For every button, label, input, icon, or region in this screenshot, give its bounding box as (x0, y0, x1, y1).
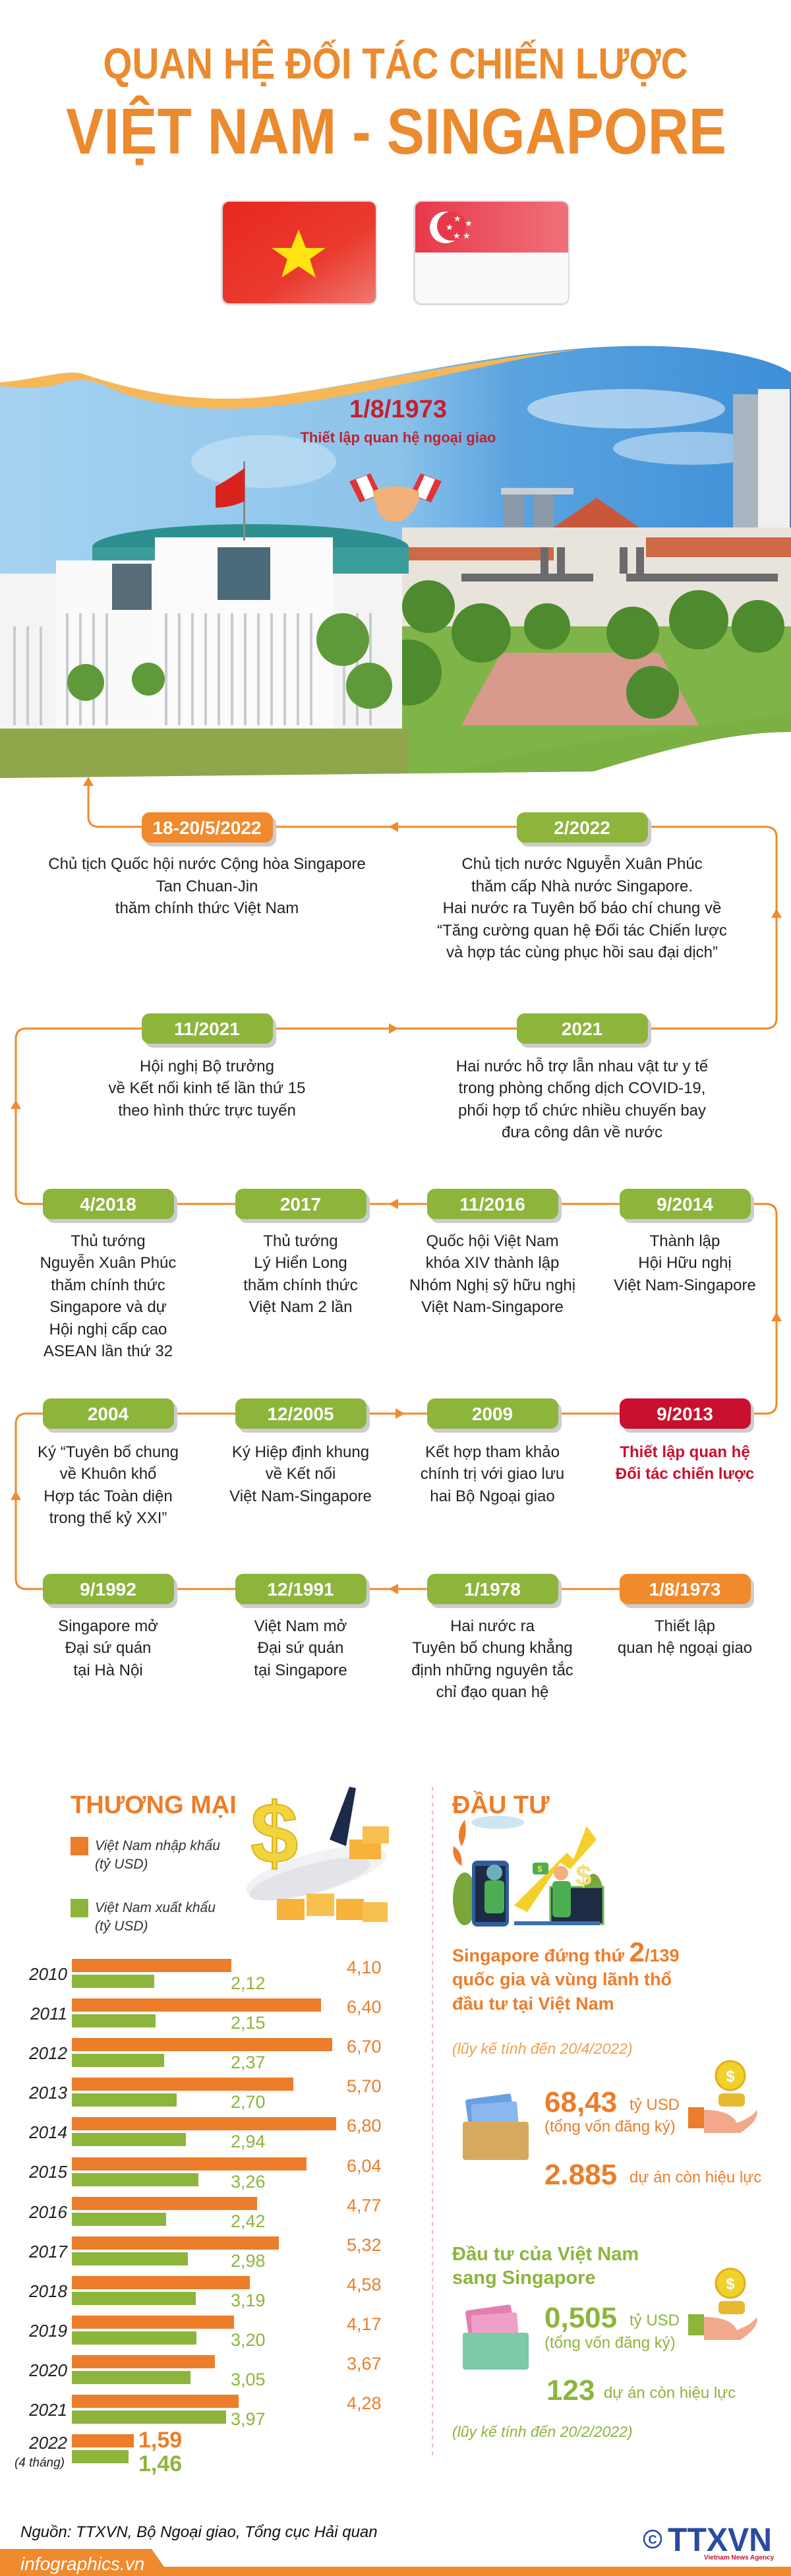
bar chart: trade: 2015 (28, 2162, 68, 2182)
stat: 123 projects: dự án còn hiệu lực (604, 2384, 736, 2402)
event: 11/2021: 11/2021 (174, 1019, 240, 1039)
event: 2009: Kết hợp tham khảo (425, 1443, 560, 1461)
title (66, 39, 726, 167)
event: 2021: đưa công dân về nước (502, 1123, 662, 1141)
text: Vietnam investment to Singapore: sang Singapore (452, 2267, 596, 2289)
icon: Singapore flag: ★ (465, 218, 473, 228)
event: 2004: về Khuôn khổ (60, 1465, 156, 1483)
bar chart: trade: 2013 (28, 2083, 68, 2103)
bar chart: trade: (4 tháng) (15, 2456, 65, 2470)
bar chart: trade: 2021 (28, 2400, 67, 2420)
event: 12/2005: Việt Nam-Singapore (229, 1487, 372, 1505)
banner date caption: Thiết lập quan hệ ngoại giao (300, 429, 496, 446)
event: 12/2005: về Kết nối (266, 1465, 336, 1483)
timeline connector (16, 779, 776, 1589)
event: 4/2018: 4/2018 (80, 1194, 136, 1214)
icon: coin in hand green (688, 2269, 757, 2340)
event: 2004: Hợp tác Toàn diện (44, 1487, 173, 1505)
event: 4/2018: ASEAN lần thứ 32 (44, 1342, 173, 1360)
event: 1/1978: Tuyên bố chung khẳng (412, 1638, 573, 1657)
text: Singapore ranking (452, 1936, 680, 2014)
bar chart: trade: 5,32 (347, 2235, 382, 2255)
event: 11/2016: Quốc hội Việt Nam (426, 1232, 559, 1250)
event: 1/1978: Hai nước ra (450, 1617, 535, 1635)
event: 2017 (235, 1189, 370, 1316)
timeline row 2 (109, 1013, 709, 1141)
bar chart: trade: 2,15 (231, 2013, 266, 2033)
arrows on timeline (11, 777, 782, 1594)
bar chart: trade: 2010 (28, 1964, 68, 1984)
event: 1/8/1973 (618, 1574, 754, 1657)
event: 2/2022: Hai nước ra Tuyên bố báo chí chung về (443, 899, 721, 917)
bar chart: trade: 2019 (28, 2321, 67, 2341)
event: 11/2016: Việt Nam-Singapore (421, 1298, 564, 1316)
note: cumulative 20/2/2022: (lũy kế tính đến 20/2/2022) (452, 2423, 633, 2440)
bar chart: trade: 2020 (28, 2360, 68, 2380)
event: 4/2018: Nguyễn Xuân Phúc (40, 1254, 176, 1272)
bar chart: trade: 6,40 (347, 1997, 382, 2017)
event: 1/8/1973: quan hệ ngoại giao (618, 1639, 752, 1657)
event: 11/2016: khóa XIV thành lập (426, 1254, 559, 1272)
event: 11/2016: Nhóm Nghị sỹ hữu nghị (409, 1276, 575, 1294)
stat: 0,505 tỷ USD: (tổng vốn đăng ký) (544, 2334, 676, 2352)
bar chart: trade: 6,70 (347, 2037, 382, 2056)
event: 18-20/5/2022 (48, 812, 366, 917)
event: 4/2018: Hội nghị cấp cao (49, 1321, 167, 1338)
event: 2/2022: thăm cấp Nhà nước Singapore. (471, 878, 693, 895)
event: 2017: Lý Hiển Long (254, 1254, 347, 1272)
text: Singapore ranking: Singapore đứng thứ 2/139 (452, 1936, 680, 1967)
event: 1/1978: 1/1978 (464, 1579, 521, 1600)
event: 11/2021 (109, 1013, 305, 1120)
legend: (tỷ USD) (95, 1919, 148, 1934)
event: 18-20/5/2022: thăm chính thức Việt Nam (115, 899, 299, 917)
banner date caption (300, 396, 496, 446)
bar chart: trade: 4,77 (347, 2196, 382, 2215)
event: 9/2014: 9/2014 (657, 1194, 713, 1214)
bar chart: trade: 3,20 (231, 2330, 266, 2350)
bar chart: trade: 2014 (28, 2122, 67, 2142)
title: QUAN HỆ ĐỐI TÁC CHIẾN LƯỢC (103, 39, 688, 88)
event: 2004: Ký “Tuyên bố chung (38, 1443, 179, 1461)
event: 2009: 2009 (472, 1404, 513, 1424)
stat: 68,43 tỷ USD: tỷ USD (630, 2096, 680, 2114)
bar chart: trade: 2012 (28, 2043, 68, 2063)
stat: 2.885 projects: dự án còn hiệu lực (630, 2169, 761, 2186)
event: 2004: 2004 (88, 1404, 129, 1424)
event: 12/1991 (235, 1574, 370, 1679)
banner date caption: 1/8/1973 (349, 396, 447, 423)
event: 2/2022: 2/2022 (554, 818, 610, 838)
bar chart: trade: 1,46 (138, 2451, 182, 2476)
event: 9/1992 (43, 1574, 177, 1679)
event: 2021: 2021 (562, 1019, 602, 1039)
event: 2021: phối hợp tổ chức nhiều chuyến bay (458, 1102, 706, 1120)
footer bar (0, 2549, 791, 2576)
stat: 2.885 projects: 2.885 (544, 2159, 617, 2191)
bar chart: trade: 5,70 (347, 2076, 382, 2096)
event: 2009 (421, 1398, 564, 1505)
stat: 0,505 tỷ USD: 0,505 (544, 2302, 617, 2334)
event: 9/2013: 9/2013 (657, 1404, 713, 1424)
bar chart: trade: 4,10 (347, 1958, 382, 1977)
event: 2017: Việt Nam 2 lần (249, 1298, 352, 1316)
bar chart: trade: 6,04 (347, 2156, 382, 2176)
event: 9/2014: Hội Hữu nghị (638, 1254, 732, 1272)
event: 11/2021: về Kết nối kinh tế lần thứ 15 (109, 1079, 305, 1097)
event: 2017: Thủ tướng (263, 1232, 338, 1250)
event: 12/1991: tại Singapore (254, 1662, 347, 1679)
event: 12/2005 (229, 1398, 372, 1505)
photo banner (0, 343, 791, 791)
event: 9/2014: Thành lập (650, 1232, 720, 1250)
icon: yellow folder (463, 2093, 529, 2160)
bar chart: trade: 2011 (30, 2004, 67, 2023)
event: 1/8/1973: Thiết lập (655, 1617, 715, 1635)
footer bar: infographics.vn (20, 2554, 144, 2574)
event: 2/2022: Chủ tịch nước Nguyễn Xuân Phúc (461, 855, 703, 873)
event: 2/2022 (437, 812, 727, 961)
event: 2009: hai Bộ Ngoại giao (430, 1487, 555, 1505)
event: 11/2021: Hội nghị Bộ trưởng (140, 1058, 274, 1075)
stat: 68,43 tỷ USD: (tổng vốn đăng ký) (544, 2118, 676, 2136)
text: Vietnam investment to Singapore: Đầu tư của Việt Nam (452, 2244, 639, 2265)
bar chart: trade: 1,59 (138, 2428, 182, 2453)
event: 9/2014 (614, 1189, 756, 1294)
event: 2/2022: và hợp tác cùng phục hồi sau đại dịch” (446, 944, 718, 961)
source: Nguồn: TTXVN, Bộ Ngoại giao, Tổng cục Hải quan (20, 2523, 378, 2541)
icon: Singapore flag (413, 200, 570, 305)
event: 9/2013 (616, 1398, 754, 1483)
note: cumulative 20/4/2022: (lũy kế tính đến 20/4/2022) (452, 2040, 633, 2057)
event: 2017: 2017 (280, 1194, 321, 1214)
event: 2021: trong phòng chống dịch COVID-19, (459, 1079, 705, 1097)
bar chart: trade: 3,97 (231, 2409, 266, 2429)
event: 2021 (456, 1013, 709, 1141)
stat: 123 projects (546, 2374, 736, 2407)
icon: dollar and plane: $ (250, 1785, 298, 1881)
icon: Singapore flag: ★ (446, 222, 454, 232)
event: 9/1992: Singapore mở (58, 1617, 158, 1635)
event: 2/2022: “Tăng cường quan hệ Đối tác Chiến lược (437, 922, 727, 940)
timeline row 1 (48, 812, 727, 961)
legend: Việt Nam nhập khẩu (95, 1838, 220, 1853)
text: Vietnam investment to Singapore (452, 2244, 639, 2289)
event: 4/2018 (40, 1189, 177, 1360)
icon: Singapore flag: ★ (454, 214, 461, 224)
event: 18-20/5/2022: 18-20/5/2022 (152, 818, 262, 838)
icon: coin in hand (688, 2061, 757, 2133)
stat: 68,43 tỷ USD: 68,43 (544, 2086, 617, 2118)
stat: 0,505 tỷ USD (544, 2302, 680, 2352)
event: 11/2021: theo hình thức trực tuyến (118, 1102, 296, 1120)
icon: Vietnam flag (221, 200, 377, 305)
event: 12/1991: 12/1991 (267, 1579, 334, 1600)
logo: TTXVN: Vietnam News Agency (704, 2554, 775, 2561)
bar chart: trade: 2,42 (231, 2211, 266, 2231)
bar chart: trade: 4,17 (347, 2314, 382, 2334)
bar chart: trade: 2022 (28, 2433, 68, 2453)
bar chart: trade: 2,94 (231, 2132, 266, 2151)
stat: 68,43 tỷ USD (544, 2086, 680, 2136)
event: 18-20/5/2022: Chủ tịch Quốc hội nước Cộng hòa Singapore (48, 855, 366, 873)
event: 12/1991: Việt Nam mở (254, 1617, 347, 1635)
bar chart: trade: 2,98 (231, 2251, 266, 2271)
event: 4/2018: thăm chính thức (51, 1276, 165, 1294)
bar chart: trade: 4,28 (347, 2393, 382, 2413)
icon: investment illustration: $ (537, 1864, 542, 1874)
heading: THƯƠNG MẠI: THƯƠNG MẠI (71, 1791, 237, 1819)
icon: Singapore flag: ★ (453, 231, 461, 241)
event: 1/1978: chỉ đạo quan hệ (436, 1683, 548, 1701)
stat: 123 projects: 123 (546, 2374, 595, 2407)
icon: handshake (349, 473, 442, 522)
timeline row 3 (40, 1189, 756, 1360)
event: 1/1978: định những nguyên tắc (411, 1662, 573, 1679)
event: 2004: trong thế kỷ XXI” (49, 1509, 167, 1527)
event: 2017: thăm chính thức (243, 1276, 358, 1294)
icon: coin in hand green: $ (726, 2275, 735, 2293)
event: 9/1992: 9/1992 (80, 1579, 136, 1600)
legend: (tỷ USD) (95, 1857, 148, 1872)
event: 12/1991: Đại sứ quán (258, 1639, 343, 1657)
timeline row 5 (43, 1574, 754, 1701)
bar chart: trade: 2017 (28, 2242, 69, 2261)
bar chart: trade: 2,37 (231, 2052, 266, 2072)
event: 2021: Hai nước hỗ trợ lẫn nhau vật tư y tế (456, 1058, 709, 1075)
stat: 0,505 tỷ USD: tỷ USD (630, 2312, 680, 2329)
event: 12/2005: Ký Hiệp định khung (232, 1443, 369, 1461)
bar chart: trade: 2,12 (231, 1973, 266, 1993)
bar chart: trade: 3,05 (231, 2370, 266, 2389)
event: 4/2018: Thủ tướng (71, 1232, 146, 1250)
event: 4/2018: Singapore và dự (49, 1298, 167, 1316)
event: 9/2013: Đối tác chiến lược (616, 1465, 754, 1483)
bar chart: trade: 2,70 (231, 2092, 266, 2112)
bar chart: trade: 3,19 (231, 2291, 266, 2310)
event: 12/2005: 12/2005 (267, 1404, 334, 1424)
icon: investment illustration (453, 1816, 604, 1927)
icon: Singapore flag: ★ (463, 231, 471, 241)
logo: TTXVN: C (649, 2533, 657, 2546)
event: 2009: chính trị với giao lưu (421, 1465, 564, 1483)
event: 9/1992: tại Hà Nội (73, 1662, 143, 1679)
bar chart: trade: 2018 (28, 2281, 68, 2301)
legend (71, 1837, 220, 1934)
bar chart: trade: 3,67 (347, 2354, 382, 2374)
event: 9/1992: Đại sứ quán (65, 1639, 151, 1657)
event: 1/8/1973: 1/8/1973 (649, 1579, 721, 1600)
event: 1/1978 (411, 1574, 573, 1701)
icon: dollar and plane (241, 1785, 392, 1922)
timeline row 4 (38, 1398, 754, 1527)
bar chart: trade: 4,58 (347, 2275, 382, 2294)
bar chart: trade (15, 1958, 382, 2476)
event: 9/2014: Việt Nam-Singapore (614, 1276, 756, 1294)
legend: Việt Nam xuất khẩu (95, 1900, 216, 1915)
text: Singapore ranking: quốc gia và vùng lãnh thổ (452, 1969, 672, 1989)
event: 11/2016 (409, 1189, 575, 1316)
bar chart: trade: 6,80 (347, 2116, 382, 2136)
stat: 2.885 projects (544, 2159, 761, 2191)
bar chart: trade: 2016 (28, 2202, 68, 2222)
icon: investment illustration: $ (575, 1860, 591, 1892)
event: 11/2016: 11/2016 (459, 1194, 525, 1214)
logo: TTXVN: TTXVN (668, 2521, 772, 2558)
event: 18-20/5/2022: Tan Chuan-Jin (156, 878, 258, 895)
event: 9/2013: Thiết lập quan hệ (620, 1443, 750, 1461)
text: Singapore ranking: đầu tư tại Việt Nam (452, 1994, 614, 2014)
icon: pink folder (463, 2304, 529, 2370)
icon: coin in hand: $ (726, 2068, 735, 2085)
heading: ĐẦU TƯ: ĐẦU TƯ (452, 1790, 550, 1819)
bar chart: trade: 3,26 (231, 2172, 266, 2192)
event: 2004 (38, 1398, 179, 1527)
